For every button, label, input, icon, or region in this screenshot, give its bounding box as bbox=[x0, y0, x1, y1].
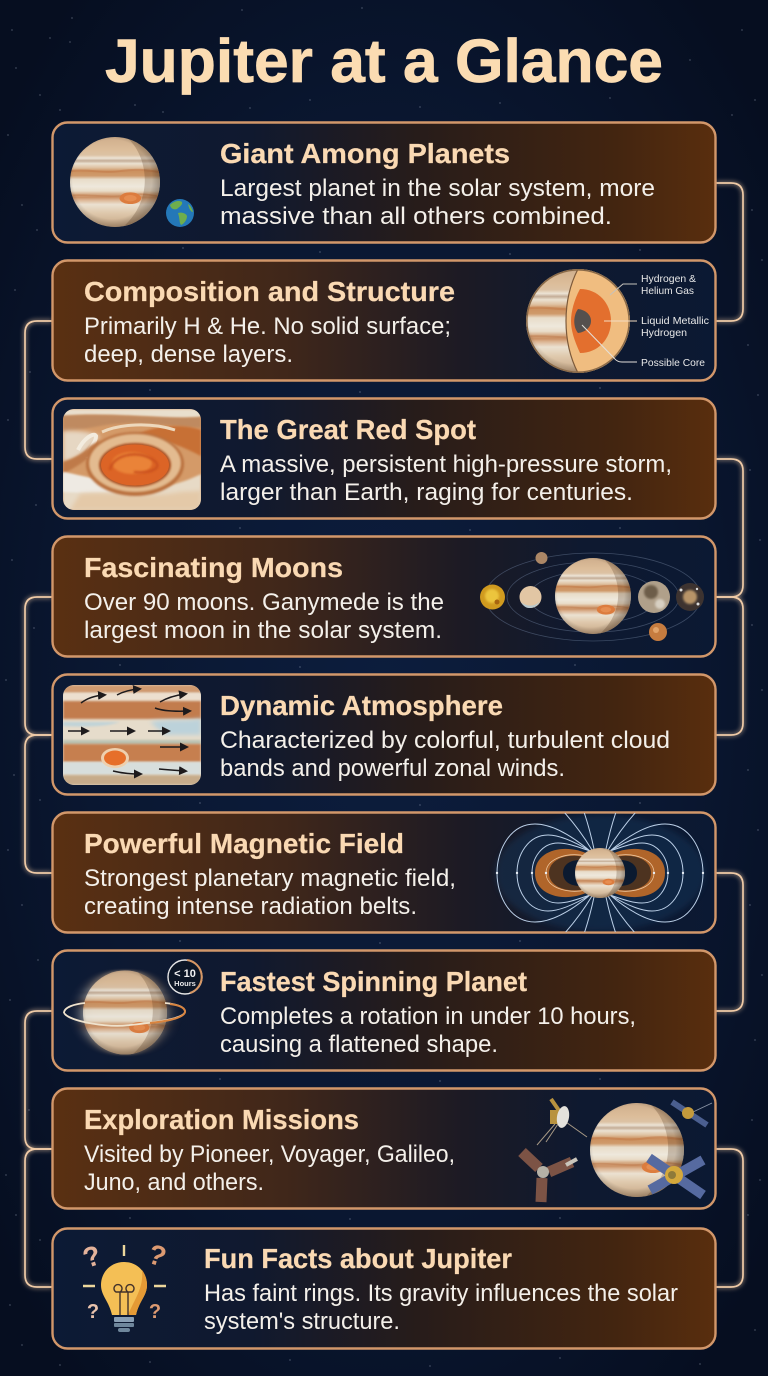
panel: dynamic atmosphere bbox=[52, 674, 716, 794]
description: deep, dense layers. bbox=[84, 341, 293, 368]
panel: magnetic field bbox=[52, 812, 716, 934]
icon: under 10 hours clock: < 10 bbox=[174, 968, 196, 980]
description: Juno, and others. bbox=[84, 1169, 264, 1196]
moon: ganymede bbox=[638, 581, 670, 613]
layer labels: Hydrogen & bbox=[641, 273, 696, 285]
leader lines bbox=[582, 284, 637, 362]
heading: Powerful Magnetic Field bbox=[84, 828, 404, 859]
diagram: magnetosphere bbox=[495, 812, 705, 934]
moon: callisto bbox=[676, 583, 704, 611]
diagram: jupiter and moons bbox=[480, 552, 704, 641]
spacecraft: juno bbox=[522, 1152, 577, 1202]
panel: composition and structure bbox=[52, 260, 716, 380]
icon: under 10 hours clock: Hours bbox=[174, 979, 196, 988]
description bbox=[204, 1280, 678, 1335]
icon: light bulb with question marks: ? bbox=[79, 1239, 105, 1274]
description bbox=[84, 1141, 455, 1196]
moon: small upper bbox=[536, 552, 548, 564]
spacecraft: lower right bbox=[649, 1158, 703, 1195]
layer labels: Possible Core bbox=[641, 357, 705, 369]
layer labels: Helium Gas bbox=[641, 285, 694, 297]
icon: spinning jupiter bbox=[64, 970, 185, 1055]
panel: exploration missions bbox=[52, 1088, 716, 1208]
icon: light bulb with question marks: ? bbox=[149, 1301, 161, 1323]
field lines bbox=[497, 812, 703, 934]
description: bands and powerful zonal winds. bbox=[220, 755, 565, 782]
heading: Fun Facts about Jupiter bbox=[204, 1243, 512, 1274]
icon: light bulb with question marks: ? bbox=[87, 1301, 99, 1323]
description: creating intense radiation belts. bbox=[84, 893, 417, 920]
radiation belts bbox=[535, 849, 665, 897]
description: larger than Earth, raging for centuries. bbox=[220, 479, 633, 506]
image: storm close-up bbox=[63, 409, 201, 510]
description: massive than all others combined. bbox=[220, 203, 612, 230]
panel: great red spot bbox=[52, 398, 716, 518]
heading: Fascinating Moons bbox=[84, 552, 343, 583]
icon: light bulb with question marks bbox=[79, 1238, 170, 1332]
panel: fascinating moons bbox=[52, 536, 716, 656]
panel: fun facts bbox=[52, 1228, 716, 1348]
panel: fastest spinning planet bbox=[52, 950, 716, 1070]
diagram: jupiter and spacecraft bbox=[522, 1099, 712, 1202]
image: cloud bands with wind arrows bbox=[63, 685, 201, 785]
description bbox=[84, 313, 451, 368]
description: Strongest planetary magnetic field, bbox=[84, 865, 456, 892]
moon: small lower bbox=[649, 623, 667, 641]
connector lines between panels bbox=[25, 183, 743, 1287]
heading: Exploration Missions bbox=[84, 1104, 359, 1135]
icon: under 10 hours clock bbox=[168, 960, 202, 994]
icon: light bulb with question marks: ? bbox=[144, 1238, 170, 1273]
heading: Giant Among Planets bbox=[220, 138, 510, 169]
description bbox=[220, 175, 655, 230]
icon: jupiter bbox=[70, 137, 161, 227]
description: Primarily H & He. No solid surface; bbox=[84, 313, 451, 340]
moon: io bbox=[480, 584, 505, 610]
heading: Fastest Spinning Planet bbox=[220, 966, 527, 997]
spacecraft: upper right bbox=[672, 1102, 712, 1125]
heading: Composition and Structure bbox=[84, 276, 455, 307]
description: A massive, persistent high-pressure storm, bbox=[220, 451, 672, 478]
description: Completes a rotation in under 10 hours, bbox=[220, 1003, 636, 1030]
description: largest moon in the solar system. bbox=[84, 617, 442, 644]
description: causing a flattened shape. bbox=[220, 1031, 498, 1058]
description: Visited by Pioneer, Voyager, Galileo, bbox=[84, 1141, 455, 1168]
description bbox=[84, 865, 456, 920]
description: Largest planet in the solar system, more bbox=[220, 175, 655, 202]
description bbox=[220, 727, 670, 782]
moon: europa bbox=[520, 586, 542, 608]
layer labels bbox=[641, 273, 709, 369]
heading: Dynamic Atmosphere bbox=[220, 690, 503, 721]
description: Characterized by colorful, turbulent cloud bbox=[220, 727, 670, 754]
description bbox=[220, 1003, 636, 1058]
description bbox=[220, 451, 672, 506]
description: Over 90 moons. Ganymede is the bbox=[84, 589, 444, 616]
description bbox=[84, 589, 444, 644]
description: Has faint rings. Its gravity influences the solar bbox=[204, 1280, 678, 1307]
diagram: jupiter cutaway bbox=[526, 269, 709, 373]
panel: giant among planets bbox=[52, 122, 716, 242]
layer labels: Hydrogen bbox=[641, 327, 687, 339]
spacecraft: voyager bbox=[537, 1099, 587, 1145]
description: system's structure. bbox=[204, 1308, 400, 1335]
layer labels: Liquid Metallic bbox=[641, 315, 709, 327]
heading: The Great Red Spot bbox=[220, 414, 476, 445]
icon: earth bbox=[166, 199, 194, 227]
title: Jupiter at a Glance bbox=[105, 27, 663, 95]
